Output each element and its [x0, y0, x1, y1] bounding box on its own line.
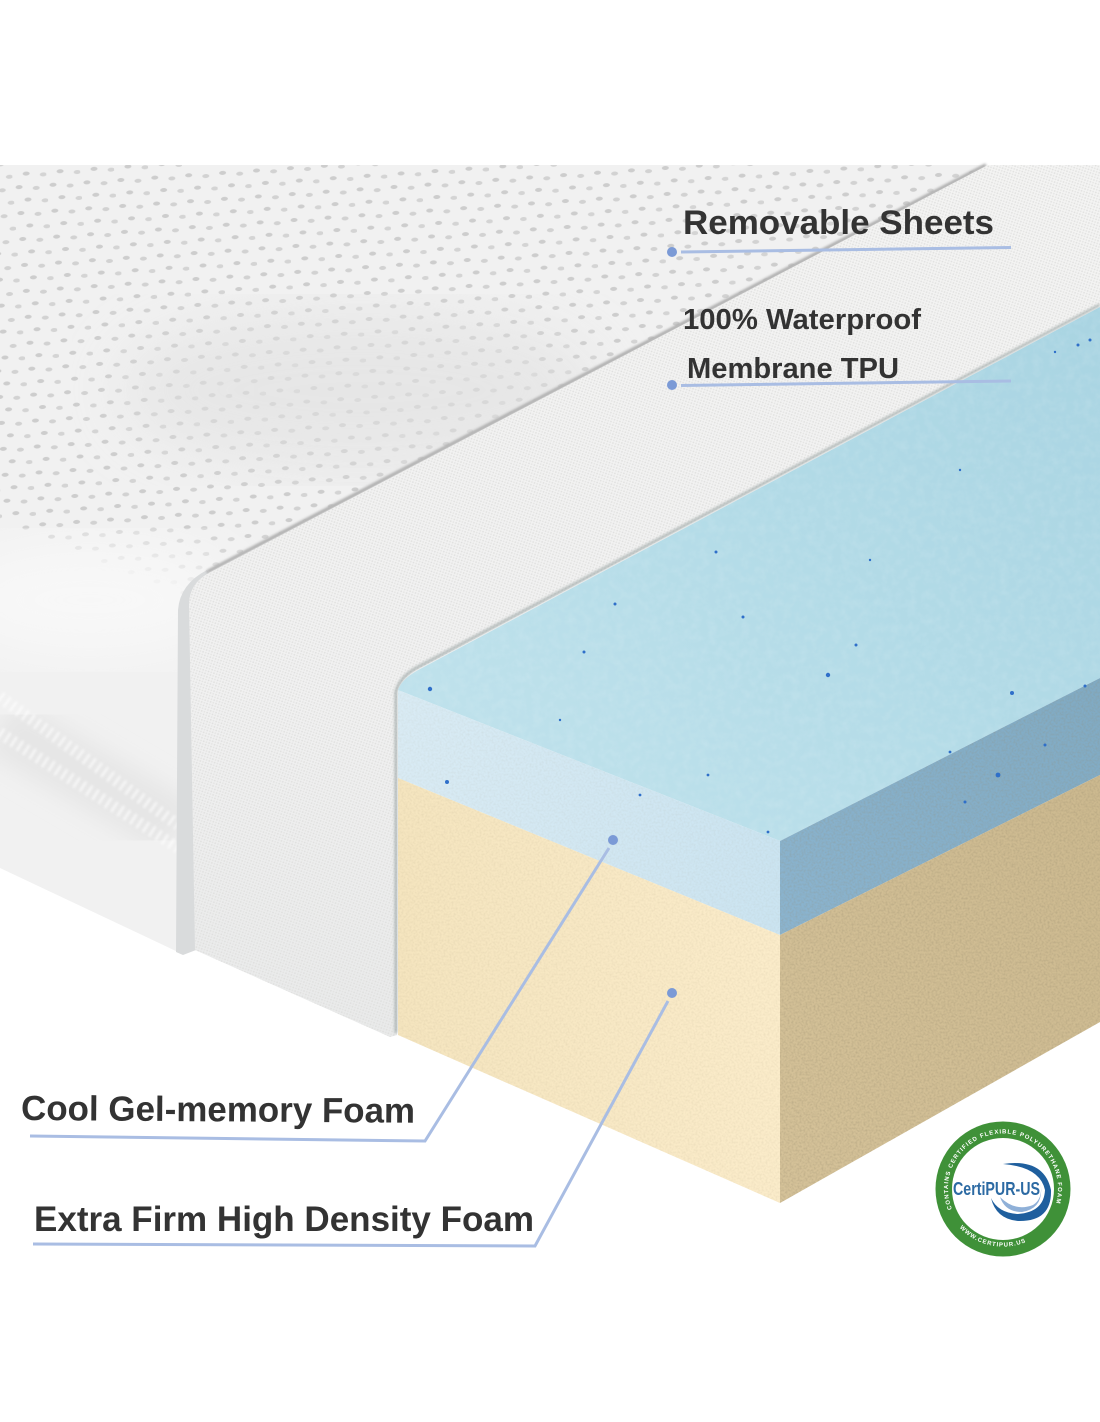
quilted surface: [0, 165, 1000, 965]
gel memory foam top: [398, 307, 1100, 841]
callout: cool gel memory foam: [21, 835, 618, 1141]
callout: waterproof membrane: Membrane TPU: [687, 353, 899, 385]
panel: quilted mattress cover: [0, 165, 1000, 965]
shadow on band edge: [396, 305, 1100, 1033]
badge swoosh: [991, 1163, 1051, 1221]
icon: CertiPUR-US badge: CertiPUR-US: [953, 1178, 1040, 1199]
callout: high density foam: [33, 988, 677, 1246]
gel speckles: [428, 338, 1092, 833]
callout: waterproof membrane: [667, 304, 1011, 390]
callout: waterproof membrane: 100% Waterproof: [683, 304, 921, 336]
icon: CertiPUR-US badge: CONTAINS CERTIFIED FLEXIBLE POLYURETHANE FOAM: [944, 1129, 1062, 1210]
stitched border: [2, 718, 176, 838]
icon: CertiPUR-US badge: [936, 1122, 1070, 1256]
panel: waterproof TPU band: [189, 165, 1100, 1037]
callout: removable sheets: [667, 204, 1011, 257]
panel: foam block: [396, 305, 1100, 1203]
gel memory foam front: [398, 690, 780, 935]
gel memory foam right: [780, 678, 1100, 935]
high density foam right: [780, 775, 1100, 1203]
callout: high density foam: Extra Firm High Density Foam: [34, 1200, 534, 1239]
high density foam front: [398, 778, 780, 1203]
callout: cool gel memory foam: Cool Gel-memory Foam: [21, 1089, 415, 1131]
mattress layers infographic: [0, 162, 1100, 1256]
seam: cover edge: [207, 165, 986, 572]
callout: removable sheets: Removable Sheets: [683, 204, 994, 242]
zipper strip: [176, 570, 210, 955]
icon: CertiPUR-US badge: WWW.CERTIPUR.US: [960, 1224, 1026, 1247]
